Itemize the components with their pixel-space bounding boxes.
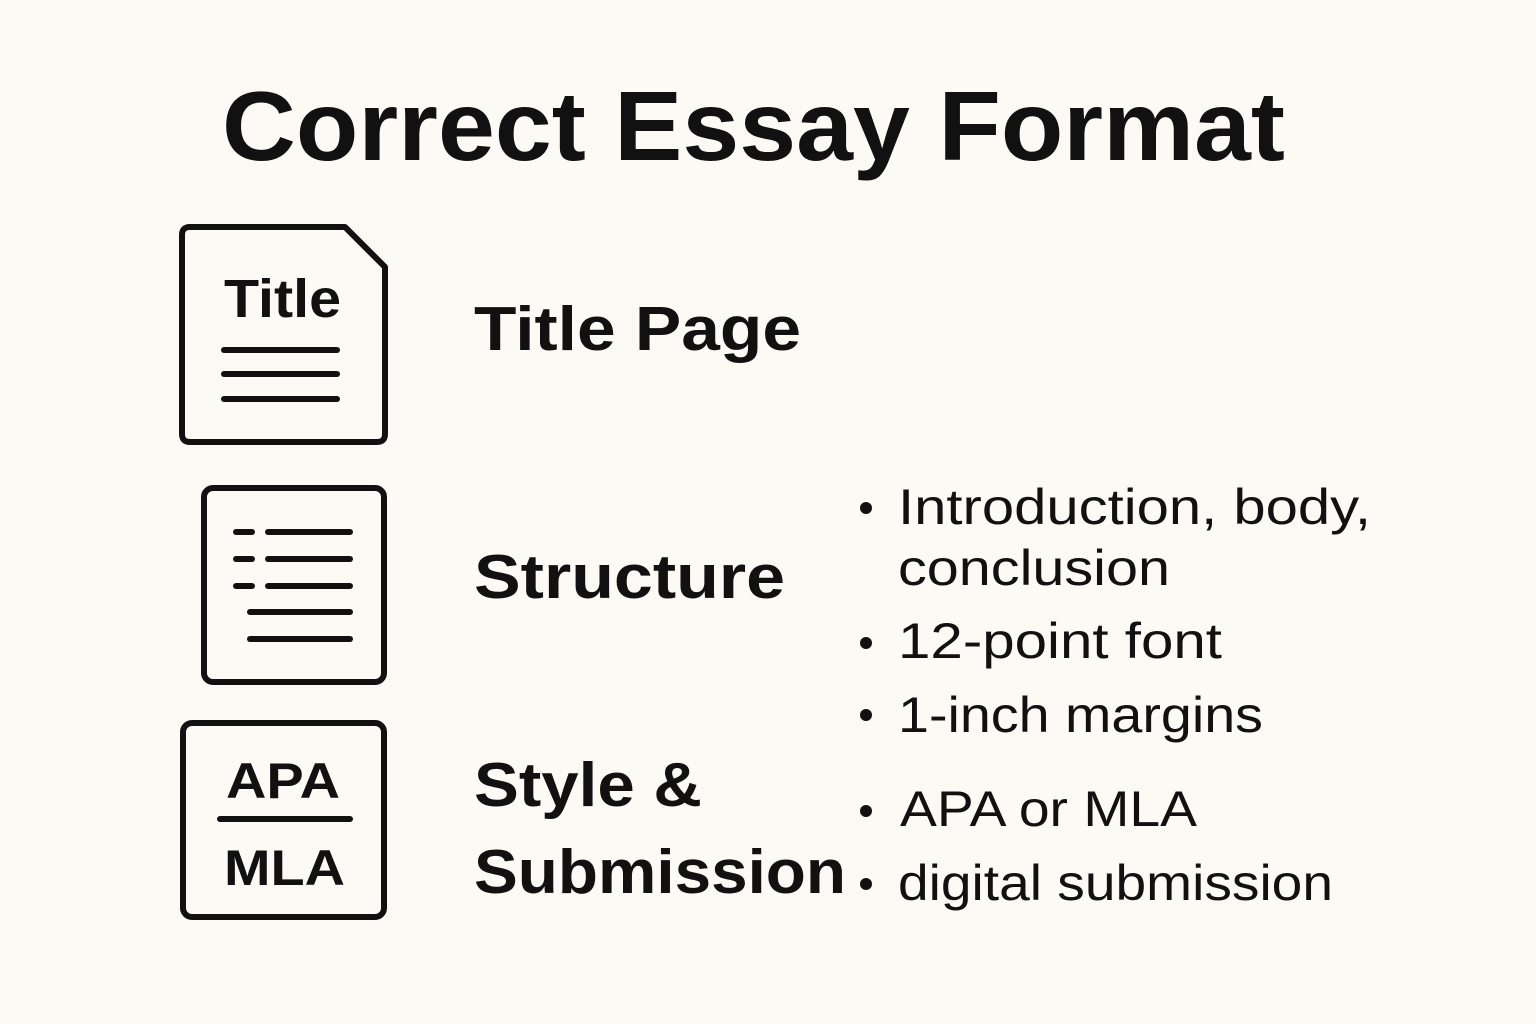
- icon: APA/MLA document: MLA: [224, 840, 345, 896]
- bullet list: digital submission: [898, 855, 1333, 911]
- label: Style & Submission: Submission: [474, 838, 846, 907]
- bullet list: Introduction, body,: [898, 479, 1371, 535]
- bullet list: 1-inch margins: [898, 687, 1263, 743]
- label: Structure: Structure: [474, 543, 785, 612]
- title: Correct Essay Format: [222, 71, 1285, 181]
- label: Style & Submission: [474, 751, 846, 907]
- label: Title Page: Title Page: [474, 295, 801, 364]
- icon: title page document: Title: [224, 269, 341, 329]
- icon: APA/MLA document: APA: [226, 753, 340, 809]
- bullet list: APA or MLA: [900, 781, 1198, 837]
- bullet list: [860, 479, 1371, 911]
- icon: title page document: [182, 227, 385, 442]
- bullet list: 12-point font: [898, 613, 1222, 669]
- icon: structure document: [204, 488, 384, 682]
- icon: APA/MLA document: [183, 723, 384, 917]
- label: Style & Submission: Style &: [474, 751, 702, 820]
- bullet list: conclusion: [898, 540, 1170, 596]
